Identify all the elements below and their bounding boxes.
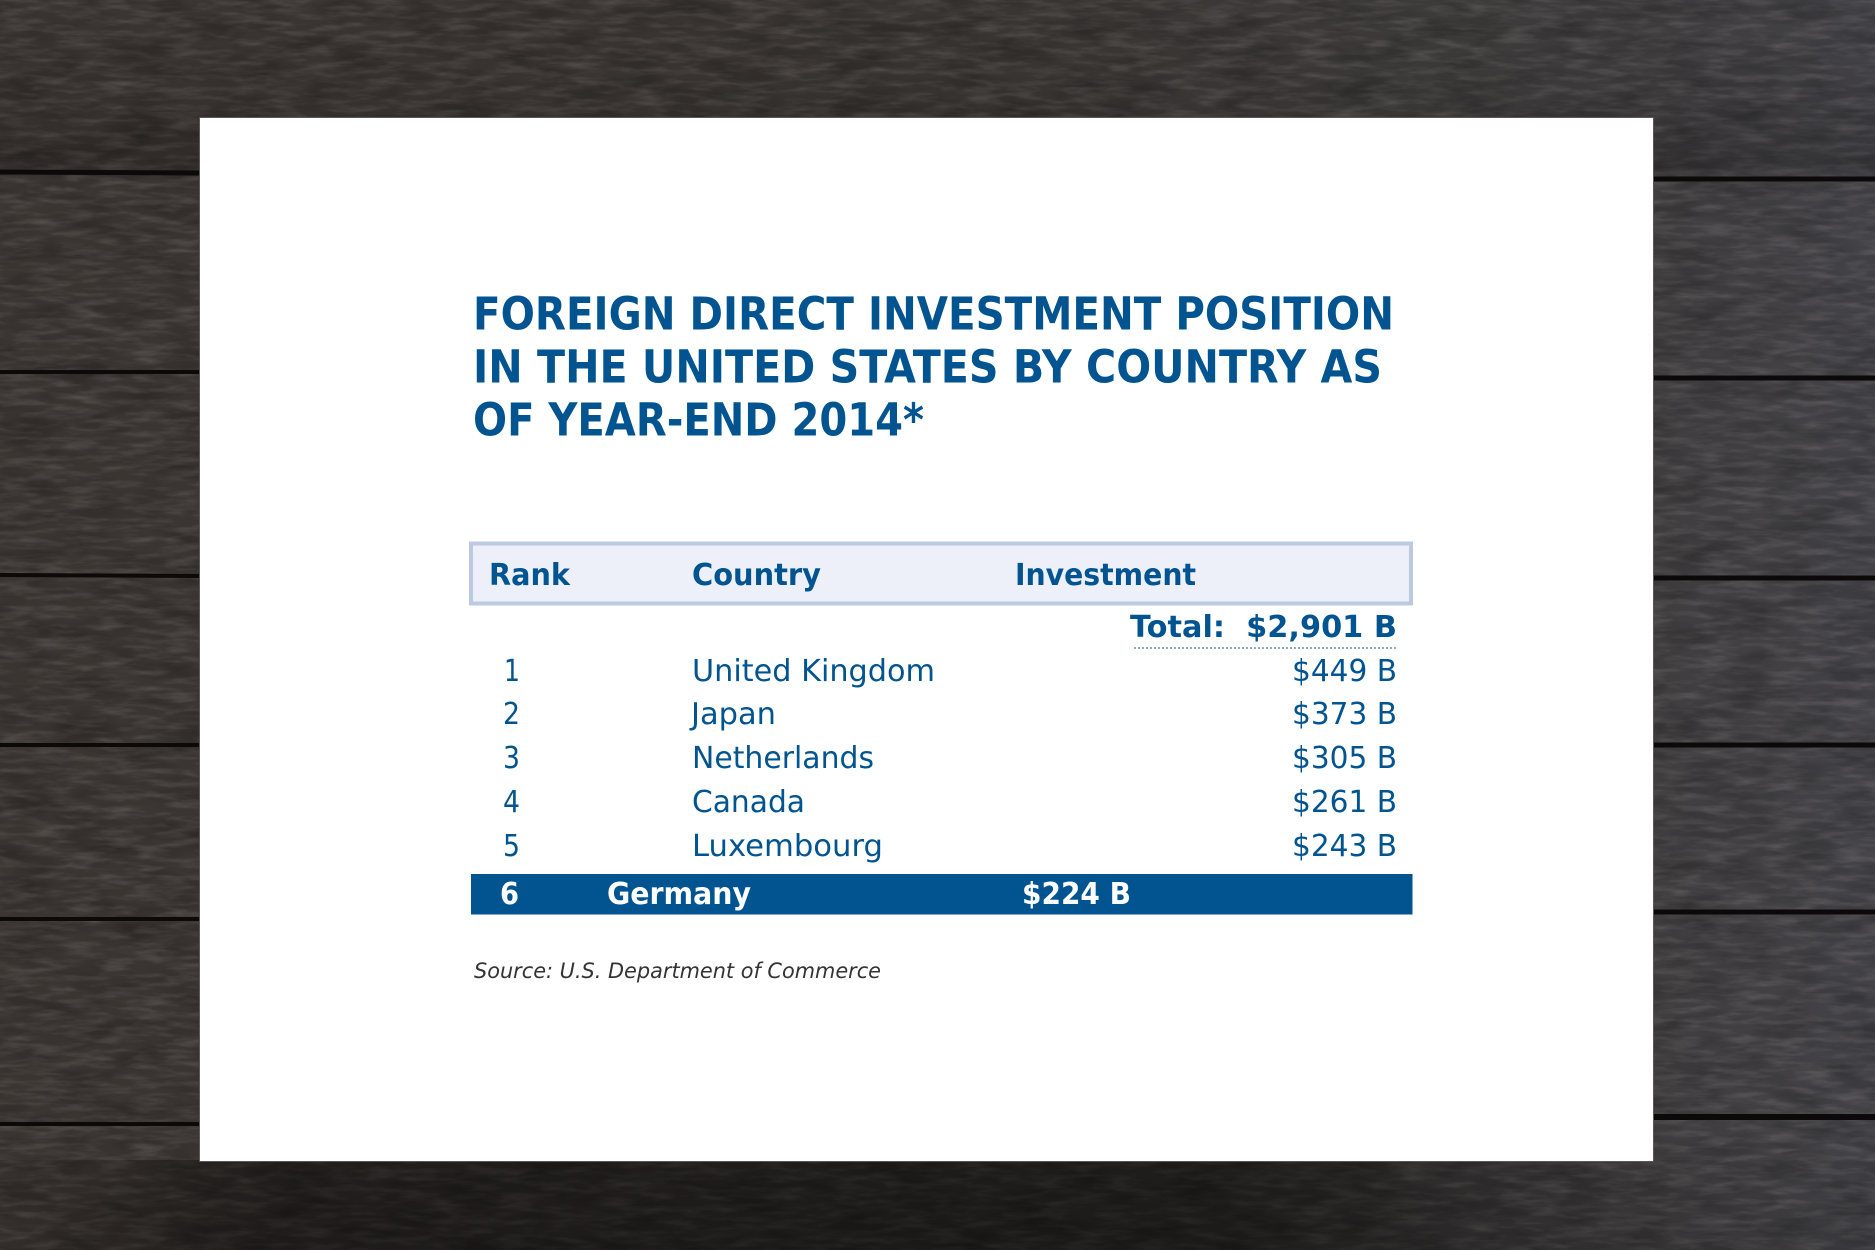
header: investment: Investment <box>1015 558 1196 593</box>
row: United Kingdom: United Kingdom <box>692 654 935 689</box>
title: OF YEAR-END 2014* <box>473 394 924 446</box>
row: Netherlands: Netherlands <box>692 741 874 776</box>
row: Japan <box>503 697 1397 732</box>
header: rank: Rank <box>489 558 571 593</box>
row: Netherlands <box>503 741 1397 776</box>
row: Luxembourg: Luxembourg <box>692 829 883 864</box>
highlighted row: Germany: Germany <box>607 877 751 912</box>
row: Canada: $261 B <box>1292 785 1397 820</box>
row: Netherlands: 3 <box>503 741 520 776</box>
row: Luxembourg: $243 B <box>1292 829 1397 864</box>
total investment: Total: $2,901 B <box>1130 610 1397 645</box>
row: Luxembourg <box>503 829 1397 864</box>
title: IN THE UNITED STATES BY COUNTRY AS <box>473 340 1382 394</box>
white card panel <box>200 118 1654 1162</box>
row: United Kingdom: 1 <box>504 654 520 689</box>
row: Japan: $373 B <box>1292 697 1397 732</box>
row: United Kingdom: $449 B <box>1292 654 1397 689</box>
row: Canada: Canada <box>692 785 805 820</box>
row: Netherlands: $305 B <box>1292 741 1397 776</box>
source note: Source: U.S. Department of Commerce <box>474 959 881 983</box>
title <box>473 288 1394 446</box>
highlighted row: Germany: $224 B <box>1022 877 1131 912</box>
row: United Kingdom <box>504 654 1397 689</box>
row: Canada: 4 <box>503 785 520 820</box>
row: Canada <box>503 785 1397 820</box>
highlighted row: Germany <box>471 874 1412 914</box>
table header row <box>471 544 1411 604</box>
title: FOREIGN DIRECT INVESTMENT POSITION <box>473 288 1394 340</box>
row: Japan: 2 <box>503 697 520 732</box>
header: country: Country <box>692 558 821 593</box>
highlighted row: Germany: 6 <box>500 877 519 912</box>
row: Japan: Japan <box>689 697 776 732</box>
row: Luxembourg: 5 <box>503 829 520 864</box>
